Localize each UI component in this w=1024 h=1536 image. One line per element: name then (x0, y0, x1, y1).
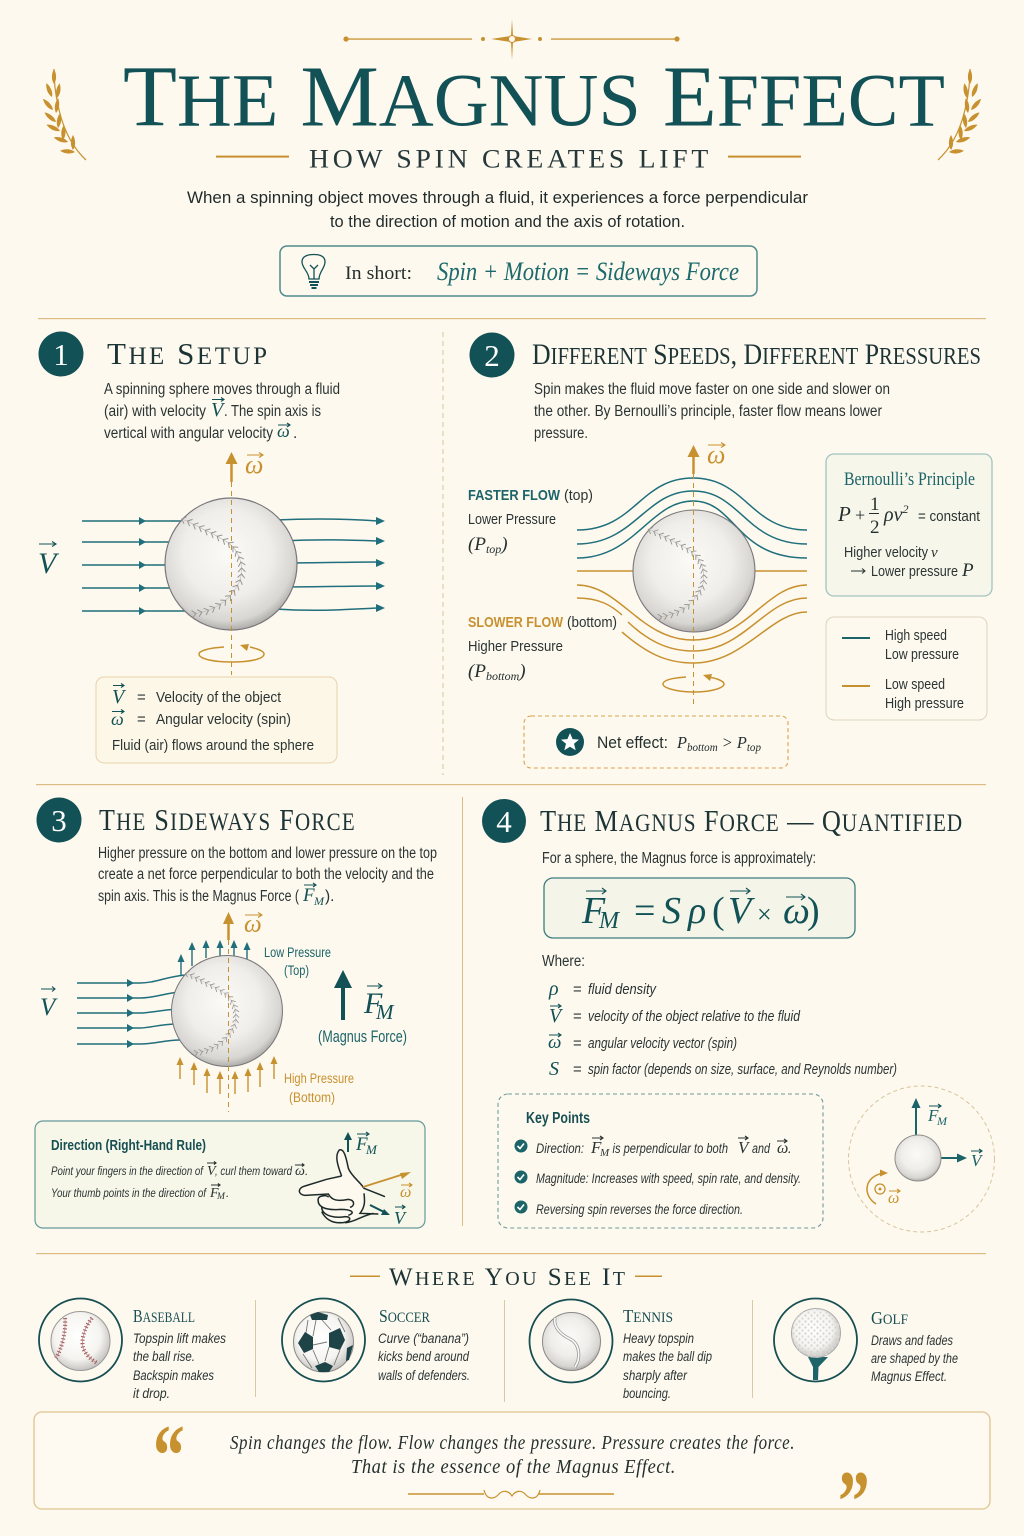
velocity label: V (38, 547, 60, 580)
badge 4 (482, 799, 526, 843)
setup text: . (293, 425, 297, 442)
flourish (408, 1490, 614, 1498)
icon: light bulb (302, 254, 325, 288)
legend: speed and pressure (826, 617, 987, 720)
label: faster flow: FASTER FLOW (468, 487, 561, 504)
callout: net effect: bottom (687, 742, 718, 754)
hand force arrows: ω (400, 1184, 411, 1201)
badge 3: 3 (51, 803, 67, 838)
badge 1 (38, 332, 84, 376)
label: slower flow: bottom (486, 669, 520, 683)
baseball sphere (165, 498, 297, 630)
formula box: S (662, 890, 681, 932)
panel: right-hand rule: V (207, 1164, 217, 1179)
badge 2 (470, 332, 514, 378)
text: baseball: BASEBALL (133, 1306, 195, 1326)
separators (255, 1300, 753, 1402)
formula box: ( (712, 890, 725, 932)
heading: different speeds: DIFFERENT SPEEDS, DIFFERENT PRESSURES (532, 338, 981, 371)
panel: bernoulli: 2 (870, 517, 880, 538)
panel: key points: Magnitude: Increases with speed, spin rate, and density. (536, 1171, 801, 1186)
label: high pressure (284, 1071, 354, 1105)
label: slower flow: (bottom) (567, 614, 617, 631)
panel: section 4 quantified (482, 799, 994, 1232)
callout: in short: In short: (345, 263, 412, 284)
panel: right-hand rule: . (305, 1164, 308, 1178)
vector diagram: F (927, 1106, 939, 1125)
callout: net effect (524, 716, 788, 768)
text: soccer: walls of defenders. (378, 1368, 470, 1383)
legend: speed and pressure: High pressure (885, 695, 964, 712)
badge 4: 4 (496, 804, 512, 839)
callout: net effect: Net effect: (597, 734, 668, 752)
hand force arrows: M (365, 1142, 378, 1157)
panel: key points: Direction: (536, 1141, 584, 1156)
panel: bernoulli: ν (931, 545, 938, 561)
baseball sphere (633, 510, 755, 632)
text: golf: are shaped by the (871, 1351, 958, 1366)
icon: baseball (39, 1298, 122, 1382)
panel: key points: is perpendicular to both (612, 1141, 728, 1156)
variable list: = (573, 1061, 582, 1078)
force text: M (313, 894, 325, 908)
spin axis and omega arrow (226, 450, 263, 675)
panel: key points (498, 1094, 823, 1228)
panel: right-hand rule: Direction (Right-Hand Rule) (51, 1138, 206, 1154)
label: low pressure: (Top) (284, 963, 309, 978)
spin axis and omega arrow: ω (707, 440, 725, 469)
legend: speed and pressure: High speed (885, 627, 947, 644)
text: soccer (378, 1306, 470, 1383)
variable list: V (549, 1005, 564, 1027)
panel: right-hand rule: . (226, 1186, 229, 1200)
panel: key points: . (788, 1141, 792, 1156)
variable list: angular velocity vector (spin) (588, 1036, 737, 1052)
text: baseball: the ball rise. (133, 1349, 195, 1364)
panel: section 3 sideways force (35, 798, 437, 1228)
speeds text: pressure. (534, 425, 588, 442)
variable list: = (573, 1035, 582, 1052)
callout: in short (280, 246, 757, 296)
vector diagram: M (936, 1114, 948, 1128)
panel: bernoulli: P (837, 502, 851, 526)
intro text: to the direction of motion and the axis of rotation. (330, 212, 685, 231)
panel: key points: Key Points (526, 1110, 590, 1127)
intro text: When a spinning object moves through a fluid, it experiences a force perpendicular (187, 188, 808, 207)
speeds text (534, 381, 890, 442)
quote text: That is the essence of the Magnus Effect. (351, 1457, 676, 1478)
setup text: A spinning sphere moves through a fluid (104, 381, 340, 398)
setup text (104, 381, 340, 442)
variable list: S (549, 1058, 559, 1080)
formula box: ω (783, 890, 810, 932)
magnus force arrow and label: (Magnus Force) (318, 1027, 407, 1046)
icon: soccer ball (282, 1298, 365, 1382)
label: faster flow (468, 487, 593, 556)
panel: bernoulli: 2 (902, 502, 908, 516)
magnus force arrow and label (318, 970, 407, 1046)
text: tennis: sharply after (623, 1368, 687, 1383)
panel: bernoulli: P (961, 560, 974, 581)
setup text: V (211, 399, 226, 421)
subtitle: HOW SPIN CREATES LIFT (309, 144, 712, 174)
faster flow curves (577, 478, 807, 558)
formula box: V (728, 890, 755, 932)
spin axis and omega arrow: ω (244, 911, 262, 938)
callout: net effect: P (677, 733, 687, 752)
formula box: × (757, 900, 772, 929)
badge 3 (36, 798, 82, 842)
check icons (514, 1140, 528, 1214)
label: low pressure: Low Pressure (264, 945, 331, 960)
formula box: ρ (687, 890, 706, 932)
legend: setup: V (112, 686, 127, 708)
text: baseball: Topspin lift makes (133, 1331, 226, 1346)
text: golf: Draws and fades (871, 1333, 953, 1348)
label: slower flow: ) (518, 661, 526, 682)
vector diagram: V (971, 1151, 984, 1170)
legend: setup: Fluid (air) flows around the sphere (112, 737, 314, 754)
speeds text: the other. By Bernoulli’s principle, faster flow means lower (534, 403, 882, 420)
panel: section 2 different speeds (468, 332, 992, 768)
title: THE MAGNUS EFFECT (123, 48, 945, 144)
quantified intro: For a sphere, the Magnus force is approximately: (542, 850, 816, 867)
panel: right-hand rule: M (216, 1192, 226, 1202)
panel: bernoulli: Higher velocity (844, 544, 928, 561)
icon: tennis ball (530, 1300, 612, 1382)
formula box: F (581, 890, 606, 932)
panel: key points: M (599, 1147, 610, 1159)
header ornament (343, 19, 680, 60)
text: soccer: kicks bend around (378, 1349, 469, 1364)
spin axis and omega arrow (688, 440, 725, 705)
text: tennis: bouncing. (623, 1386, 671, 1401)
item: baseball (39, 1298, 226, 1401)
icon: golf ball on tee (774, 1298, 857, 1382)
flow streamlines (77, 975, 185, 1048)
legend: speed and pressure: Low speed (885, 676, 945, 693)
baseball sphere (172, 956, 282, 1066)
text: soccer: SOCCER (379, 1306, 430, 1326)
heading: sideways force: THE SIDEWAYS FORCE (99, 802, 356, 837)
label: low pressure (264, 945, 331, 978)
setup text: . The spin axis is (224, 403, 321, 420)
velocity label (40, 986, 58, 1021)
label: high pressure: High Pressure (284, 1071, 354, 1086)
force text: ). (325, 888, 334, 905)
legend: setup: = (137, 689, 146, 706)
variable list: = (573, 1008, 582, 1025)
panel: right-hand rule (35, 1121, 425, 1228)
spin axis and omega arrow: ω (245, 450, 263, 479)
legend: setup: Angular velocity (spin) (156, 711, 291, 728)
item: tennis (530, 1300, 712, 1401)
badge 2: 2 (484, 338, 500, 373)
spin arrow (663, 674, 724, 692)
variable list: velocity of the object relative to the fluid (588, 1009, 801, 1025)
callout: net effect: > P (718, 733, 747, 752)
text: golf: GOLF (871, 1308, 908, 1328)
label: high pressure: (Bottom) (289, 1090, 335, 1105)
force text: spin axis. This is the Magnus Force ( (98, 888, 300, 905)
label: faster flow: (P (468, 534, 486, 555)
hand force arrows (344, 1132, 412, 1228)
text: baseball: it drop. (133, 1386, 170, 1401)
text: tennis (623, 1306, 712, 1401)
magnus force arrow and label: F (363, 987, 383, 1020)
panel: bernoulli: Bernoulli’s Principle (844, 469, 975, 490)
panel: bernoulli (826, 454, 992, 596)
quote text (230, 1433, 795, 1478)
label: faster flow: Lower Pressure (468, 511, 556, 528)
icon: right hand (299, 1150, 385, 1223)
panel: right-hand rule: Your thumb points in the direction of (51, 1186, 207, 1200)
spin axis and omega arrow (223, 911, 262, 1112)
label: faster flow: (top) (564, 487, 593, 504)
vector diagram: ω (888, 1190, 899, 1207)
label: slower flow: Higher Pressure (468, 638, 563, 655)
panel: key points: F (590, 1138, 602, 1157)
variable list (548, 978, 897, 1080)
velocity label: V (40, 994, 58, 1021)
legend: speed and pressure: Low pressure (885, 646, 959, 663)
force text: Higher pressure on the bottom and lower pressure on the top (98, 845, 437, 862)
vector diagram (848, 1086, 994, 1232)
low pressure arrows (178, 940, 250, 976)
force text (98, 845, 437, 908)
panel: right-hand rule: Point your fingers in the direction of (51, 1164, 204, 1178)
setup text: vertical with angular velocity (104, 425, 273, 442)
text: tennis: makes the ball dip (623, 1349, 712, 1364)
panel: key points: Reversing spin reverses the force direction. (536, 1202, 743, 1217)
quote marks: “ (153, 1407, 185, 1505)
panel: bernoulli: + (855, 505, 865, 525)
panel: bernoulli: = constant (918, 508, 981, 525)
high pressure arrows (176, 1056, 278, 1094)
callout: in short: Spin + Motion = Sideways Force (437, 257, 739, 286)
flow streamlines (82, 517, 385, 615)
formula box: = (634, 890, 655, 932)
text: baseball: Backspin makes (133, 1368, 214, 1383)
label: slower flow: SLOWER FLOW (468, 614, 564, 631)
heading: the setup: THE SETUP (107, 336, 267, 371)
speeds text: Spin makes the fluid move faster on one side and slower on (534, 381, 890, 398)
left laurel (41, 69, 86, 160)
force text: F (302, 885, 315, 906)
spin arrow (199, 644, 264, 662)
panel: right-hand rule: , curl them toward (215, 1164, 292, 1178)
text: baseball (133, 1306, 226, 1401)
slower flow curves (577, 571, 807, 663)
formula box: ) (807, 890, 820, 932)
hand force arrows: V (394, 1208, 407, 1228)
panel: right-hand rule: ω (295, 1164, 305, 1179)
quote marks (153, 1407, 870, 1536)
variable list: spin factor (depends on size, surface, and Reynolds number) (588, 1062, 897, 1078)
legend: setup (96, 677, 337, 763)
dividers (36, 318, 986, 1254)
formula box (544, 878, 855, 938)
text: tennis: Heavy topspin (623, 1331, 694, 1346)
variable list: = (573, 981, 582, 998)
panel: bernoulli: ρν (884, 504, 902, 526)
text: tennis: TENNIS (623, 1306, 673, 1326)
panel: quote (34, 1407, 990, 1536)
legend: setup: ω (111, 709, 124, 729)
magnus force arrow and label: M (375, 1000, 395, 1024)
hand force arrows: F (355, 1134, 368, 1155)
setup text: ω (277, 421, 290, 441)
heading: where you see it: WHERE YOU SEE IT (389, 1264, 625, 1291)
text: golf: Magnus Effect. (871, 1369, 947, 1384)
where text: Where: (542, 953, 585, 970)
legend: setup: = (137, 711, 146, 728)
panel: key points: and (752, 1141, 770, 1156)
text: golf (871, 1308, 958, 1384)
text: soccer: Curve (“banana”) (378, 1331, 469, 1346)
badge 1: 1 (53, 337, 69, 372)
variable list: fluid density (588, 982, 657, 998)
panel: section 1 the setup (38, 332, 385, 763)
label: faster flow: ) (500, 534, 508, 555)
panel: key points: V (738, 1138, 751, 1157)
force text: create a net force perpendicular to both the velocity and the (98, 866, 434, 883)
setup text: (air) with velocity (104, 403, 206, 420)
panel: key points: ω (777, 1140, 788, 1157)
label: slower flow (468, 614, 617, 683)
item: golf (774, 1298, 958, 1384)
variable list: ρ (548, 978, 559, 1000)
variable list: ω (548, 1032, 561, 1053)
panel: right-hand rule: F (209, 1186, 219, 1201)
right laurel (938, 69, 983, 160)
panel: bernoulli: 1 (870, 494, 880, 515)
label: slower flow: (P (468, 661, 486, 682)
callout: net effect: top (747, 742, 761, 754)
intro text (187, 188, 808, 231)
heading: magnus force quantified: THE MAGNUS FORCE — QUANTIFIED (540, 803, 963, 838)
label: faster flow: top (486, 542, 501, 556)
panel: bernoulli: Lower pressure (871, 563, 958, 580)
quote text: Spin changes the flow. Flow changes the pressure. Pressure creates the force. (230, 1433, 795, 1454)
item: soccer (282, 1298, 470, 1383)
legend: setup: Velocity of the object (156, 689, 282, 706)
formula box: M (598, 908, 621, 934)
